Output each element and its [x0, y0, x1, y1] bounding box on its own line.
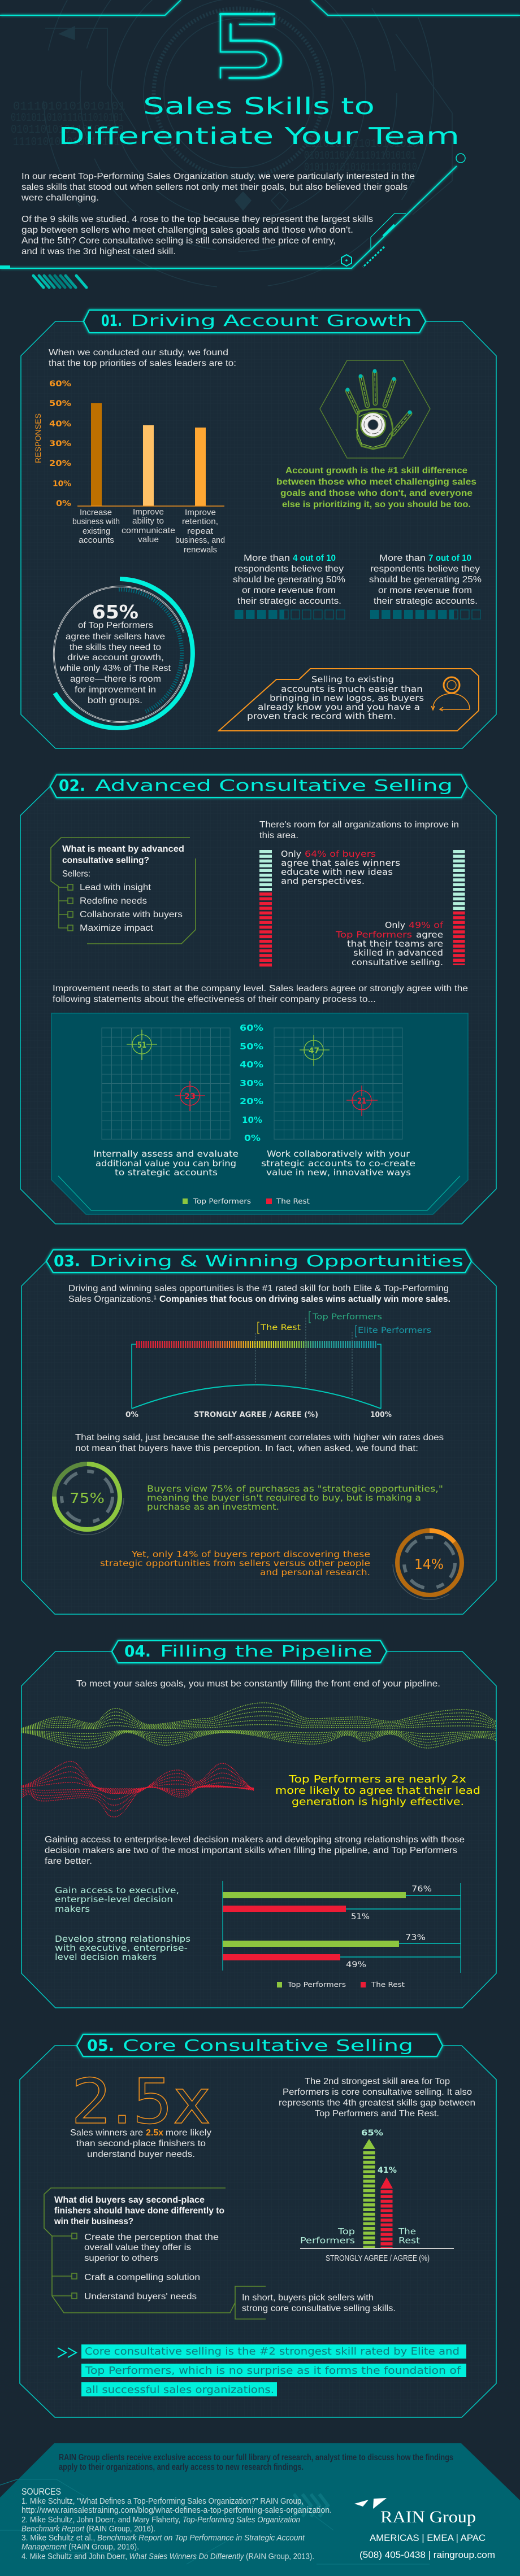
- radial stat: 65 percent: both groups.: [88, 696, 142, 705]
- bar chart: sales leader priorities: 20%: [49, 459, 71, 468]
- text: number one rated skill: Driving and winning sales opportunities is the #1 rated skill for both Elite & Top-Performing: [68, 1284, 449, 1293]
- stat: 4 out of 10: [233, 553, 345, 619]
- sources: Benchmark Report (RAIN Group, 2016).: [21, 2525, 155, 2534]
- stat: 4 out of 10: More than: [244, 553, 290, 563]
- text: second strongest skill: Top Performers and The Rest.: [315, 2109, 439, 2119]
- bar chart: sales leader priorities: retention,: [182, 517, 218, 526]
- big numeral 5: [220, 14, 281, 78]
- intro text: [21, 172, 415, 256]
- stat: 4 out of 10: 4 out of 10: [293, 553, 336, 563]
- title: Sales Skills to: [143, 93, 375, 120]
- heading 03: Driving & Winning Opportunities: [89, 1252, 463, 1270]
- text: 14 percent of buyers: strategic opportunities from sellers versus other people: [100, 1558, 370, 1568]
- sources: SOURCES: [21, 2486, 61, 2497]
- header frame line: [0, 0, 520, 15]
- bar chart: sales leader priorities: renewals: [184, 546, 217, 555]
- footer circuit pattern: [0, 2479, 430, 2564]
- intro text: Of the 9 skills we studied, 4 rose to the top because they represent the largest skills: [21, 215, 373, 224]
- box: what did buyers say: finishers should have done differently to: [54, 2206, 224, 2216]
- callout: account growth number one: goals and those who don't, and everyone: [280, 489, 473, 498]
- bar chart: executive access: 51%: [351, 1912, 370, 1921]
- bar chart: executive access: [55, 1881, 461, 1973]
- callout: account growth number one: between those who meet challenging sales: [276, 477, 476, 487]
- header lower frame with circle node, chevrons and hexagon: [0, 154, 465, 268]
- text: sales winners: than second-place finishers to: [76, 2139, 206, 2148]
- intro text: were challenging.: [21, 193, 99, 203]
- panel frame: [21, 321, 496, 748]
- background: HUD rings and binary pattern: 1110101011011010100101: [305, 173, 415, 186]
- box: what did buyers say: [44, 2188, 235, 2313]
- axis labels: 20%: [240, 1096, 263, 1106]
- stat: 4 out of 10: respondents believe they: [235, 564, 344, 574]
- callout: nearly 2x: more likely to agree that their lead: [275, 1785, 480, 1797]
- bar chart: sales leader priorities: ability to: [132, 517, 164, 526]
- text: room to improve: There's room for all organizations to improve in: [259, 820, 459, 830]
- label: elite performers: [356, 1326, 431, 1337]
- axis labels: 100%: [370, 1411, 392, 1419]
- bar chart: executive access: 76%: [411, 1885, 432, 1894]
- legend: Top Performers: [287, 1980, 346, 1989]
- box: what is advanced consultative selling: Maximize impact: [80, 923, 154, 933]
- text: sales winners: more likely: [166, 2128, 211, 2138]
- heading 02: [50, 775, 467, 797]
- text: fill the pipeline: To meet your sales goals, you must be constantly filling the front end of your pipeline.: [76, 1679, 440, 1689]
- callout: selling to existing accounts: bringing in new logos, as buyers: [270, 693, 424, 703]
- title: [58, 93, 460, 150]
- bar chart: sales leader priorities: 30%: [49, 439, 71, 448]
- label: top performers: [309, 1311, 382, 1323]
- meter: 64 percent of buyers: [266, 849, 400, 967]
- highlighted conclusion: all successful sales organizations.: [85, 2384, 274, 2396]
- bar chart: sales leader priorities: value: [138, 535, 159, 544]
- radial stat: 65 percent: agree—there is room: [70, 674, 161, 684]
- text: room to improve: [259, 820, 459, 840]
- box: what did buyers say: Craft a compelling solution: [84, 2273, 200, 2282]
- text: access to decision makers: fare better.: [45, 1856, 92, 1866]
- bar chart: 65 vs 41 percent: Performers: [300, 2235, 355, 2246]
- logo: RAIN Group: [354, 2498, 495, 2560]
- panel: 04 filling the pipeline: [21, 1641, 496, 2008]
- text: second strongest skill: Performers is core consultative selling. It also: [283, 2087, 472, 2097]
- callout: selling to existing accounts: already know you and you have a: [258, 702, 420, 712]
- bar chart: executive access: 73%: [405, 1933, 426, 1942]
- bar chart: sales leader priorities: communicate: [122, 526, 175, 535]
- captions: to strategic accounts: [115, 1167, 218, 1178]
- sources: 4. Mike Schultz and John Doerr, What Sales Winners Do Differently (RAIN Group, 2013).: [21, 2552, 314, 2561]
- text: buyer perception: [75, 1433, 444, 1453]
- chart panel: target grids: [51, 1013, 468, 1214]
- captions: additional value you can bring: [96, 1158, 236, 1169]
- callout: selling to existing accounts: accounts is much easier than: [281, 684, 423, 694]
- heading 04: 04.: [124, 1642, 151, 1660]
- sources: 2. Mike Schultz, John Doerr, and Mary Flaherty, Top-Performing Sales Organization: [21, 2516, 300, 2525]
- heading 05: [77, 2034, 443, 2056]
- text: buyer perception: That being said, just because the self-assessment correlates with higher win rates does: [75, 1433, 444, 1442]
- icon: person with cycle arrow: [431, 677, 470, 711]
- heading 04: [112, 1641, 387, 1663]
- bar chart: sales leader priorities: [33, 380, 225, 555]
- bar chart: executive access: Develop strong relationships: [55, 1934, 190, 1944]
- label: the rest: The Rest: [260, 1323, 301, 1332]
- radial stat: 65 percent: agree their sellers have: [66, 632, 165, 642]
- bar chart: sales leader priorities: Increase: [80, 508, 112, 517]
- bar chart: 65 vs 41 percent: 65%: [361, 2129, 383, 2138]
- bar chart: 65 vs 41 percent: The: [398, 2226, 416, 2237]
- callout: nearly 2x: [275, 1773, 480, 1808]
- intro text: sales skills that stood out when sellers not only met their goals, but also believed their goals: [21, 182, 408, 192]
- bar chart: 65 vs 41 percent: 41%: [378, 2166, 397, 2175]
- grid: right: [274, 1028, 402, 1139]
- logo: RAIN Group: AMERICAS | EMEA | APAC: [370, 2533, 486, 2543]
- box: what did buyers say: What did buyers say second-place: [54, 2195, 205, 2205]
- grid: left: [102, 1028, 230, 1139]
- text: number one rated skill: Sales Organizations.¹: [68, 1294, 157, 1304]
- bar chart: sales leader priorities: RESPONSES: [33, 413, 42, 463]
- panel frame: [21, 1261, 496, 1614]
- text: sales winners: [70, 2128, 211, 2159]
- bar chart: 65 vs 41 percent: Top: [337, 2226, 355, 2237]
- sources: 1. Mike Schultz, "What Defines a Top-Performing Sales Organization?" RAIN Group,: [21, 2497, 304, 2506]
- axis labels: 0%: [125, 1411, 138, 1419]
- target: 23: 23: [184, 1092, 196, 1101]
- text: 75 percent of purchases: meaning the buyer isn't required to buy, but is making a: [147, 1493, 421, 1503]
- text: 14 percent of buyers: and personal research.: [260, 1567, 370, 1577]
- stat: 4 out of 10: their strategic accounts.: [237, 596, 341, 606]
- bar chart: executive access: enterprise-level decision: [55, 1894, 173, 1904]
- box: what did buyers say: win their business?: [54, 2217, 133, 2226]
- label: elite performers: Elite Performers: [358, 1326, 431, 1335]
- callout: in short: In short, buyers pick sellers with: [242, 2293, 374, 2303]
- intro text: gap between sellers who meet challenging sales goals and those who don't.: [21, 225, 353, 235]
- stat: 7 out of 10: respondents believe they: [370, 564, 480, 574]
- callout: account growth number one: else is prioritizing it, so you should be too.: [282, 500, 471, 509]
- text: 75 percent of purchases: [147, 1484, 443, 1512]
- callout: selling to existing accounts: [219, 669, 479, 731]
- text: 14 percent of buyers: [100, 1549, 370, 1577]
- legend: [277, 1980, 405, 1989]
- target: 21: [346, 1086, 378, 1116]
- highlighted conclusion: Core consultative selling is the #2 strongest skill rated by Elite and: [85, 2346, 460, 2357]
- logo: RAIN Group: RAIN Group: [380, 2508, 476, 2526]
- radial stat: 65 percent: [54, 579, 193, 728]
- axis labels: 60%: [240, 1023, 263, 1033]
- axis labels: 50%: [240, 1041, 263, 1052]
- text: sales winners: Sales winners are: [70, 2128, 143, 2138]
- bar chart: sales leader priorities: 40%: [49, 420, 71, 429]
- meter: 64 percent of buyers: 64% of buyers: [305, 849, 376, 859]
- legend: The Rest: [276, 1197, 310, 1205]
- meter: 64 percent of buyers: and perspectives.: [281, 876, 365, 886]
- meter: 49 percent of top performers: Only: [385, 920, 405, 930]
- heading 03: [46, 1250, 471, 1272]
- stat: 7 out of 10: or more revenue from: [378, 586, 472, 595]
- sources: 3. Mike Schultz et al., Benchmark Report on Top Performance in Strategic Account: [21, 2534, 305, 2543]
- meter: 64 percent of buyers: Only: [281, 849, 301, 859]
- text: second strongest skill: [279, 2077, 475, 2119]
- text: sales winners: 2.5x: [146, 2128, 163, 2138]
- bar chart: executive access: Gain access to executive,: [55, 1885, 179, 1895]
- sources: [21, 2486, 332, 2561]
- axis labels: 30%: [240, 1078, 263, 1088]
- title: Differentiate Your Team: [58, 123, 460, 150]
- text: clients receive: [59, 2453, 453, 2472]
- heading 05: Core Consultative Selling: [123, 2036, 413, 2055]
- intro text: and it was the 3rd highest rated skill.: [21, 247, 176, 256]
- text: 14 percent of buyers: Yet, only 14% of buyers report discovering these: [131, 1549, 370, 1559]
- text: priorities intro: When we conducted our study, we found: [49, 348, 228, 358]
- box: what is advanced consultative selling: Redefine needs: [80, 896, 147, 906]
- box: what did buyers say: Understand buyers' needs: [84, 2292, 197, 2302]
- panel frame: [21, 1651, 496, 2008]
- stat: 7 out of 10: More than: [379, 553, 426, 563]
- text: buyer perception: not mean that buyers have this perception. In fact, when asked, we found that:: [75, 1444, 418, 1453]
- target: 51: [127, 1030, 157, 1060]
- logo: RAIN Group: (508) 405-0438 | raingroup.com: [359, 2549, 495, 2560]
- bar chart: 65 vs 41 percent: STRONGLY AGREE / AGREE (%): [326, 2254, 430, 2263]
- meter: 49 percent of top performers: agree: [416, 930, 443, 940]
- text: improvement intro: [53, 984, 468, 1004]
- stat: 2.5x outlined: 2.5x: [71, 2065, 211, 2138]
- captions: Work collaboratively with your: [267, 1149, 410, 1159]
- bar chart: sales leader priorities: 10%: [53, 480, 71, 489]
- box: what is advanced consultative selling: Sellers:: [62, 869, 90, 879]
- radial stat: 65 percent: for improvement in: [75, 685, 156, 695]
- bar chart: sales leader priorities: 60%: [49, 380, 71, 389]
- stat: 4 out of 10: or more revenue from: [242, 586, 336, 595]
- donut: 75 percent: [54, 1464, 124, 1535]
- background: HUD rings and binary pattern: 0101101010101111101010: [304, 162, 417, 175]
- label: top performers: Top Performers: [312, 1313, 382, 1322]
- radial stat: 65 percent: while only 43% of The Rest: [59, 664, 171, 673]
- bar chart: 65 vs 41 percent: Rest: [398, 2235, 420, 2246]
- axis labels: STRONGLY AGREE / AGREE (%): [194, 1411, 318, 1419]
- stat: 4 out of 10: should be generating 50%: [233, 575, 345, 585]
- callout: account growth number one: Account growth is the #1 skill difference: [285, 466, 467, 476]
- chart: agreement distribution: [125, 1311, 431, 1419]
- axis labels: 10%: [242, 1115, 262, 1125]
- stat: 7 out of 10: [369, 553, 482, 619]
- background: HUD rings and binary pattern: 0111010101010101: [13, 101, 125, 114]
- panel frame: [20, 786, 496, 1224]
- background: HUD rings and binary pattern: 0101101010110101010: [11, 124, 124, 137]
- bar chart: sales leader priorities: 0%: [56, 499, 71, 508]
- bar chart: sales leader priorities: accounts: [79, 536, 114, 545]
- highlighted conclusion: [81, 2344, 466, 2396]
- background: HUD rings and binary pattern: 0101011010111011010101: [11, 112, 124, 125]
- bar chart: sales leader priorities: Improve: [133, 508, 164, 517]
- text: 75 percent of purchases: purchase as an investment.: [147, 1502, 279, 1512]
- box: what is advanced consultative selling: Lead with insight: [80, 883, 151, 892]
- text: priorities intro: that the top priorities of sales leaders are to:: [49, 359, 236, 368]
- legend: [183, 1197, 310, 1205]
- bar chart: executive access: 49%: [346, 1960, 366, 1969]
- meter: 64 percent of buyers: educate with new ideas: [281, 867, 393, 877]
- intro text: And the 5th? Core consultative selling is still considered the price of entry,: [21, 236, 336, 246]
- donut: 75 percent: 75%: [70, 1490, 105, 1506]
- background: HUD rings and binary pattern: 0101011010111011010101: [304, 150, 416, 163]
- axis labels: 40%: [240, 1060, 263, 1070]
- radial stat: 65 percent: of Top Performers: [78, 621, 153, 630]
- text: second strongest skill: The 2nd strongest skill area for Top: [305, 2077, 450, 2086]
- text: room to improve: this area.: [259, 831, 298, 840]
- wave: the rest: [21, 1762, 254, 1817]
- background: HUD rings and binary pattern: 1110101010100101010: [13, 136, 126, 149]
- captions: strategic accounts to co-create: [261, 1158, 415, 1169]
- meter: 49 percent of top performers: consultative selling.: [352, 957, 443, 967]
- hatch stripes: [33, 276, 86, 287]
- box: what is advanced consultative selling: [51, 838, 196, 944]
- meter: 49 percent of top performers: 49% of: [409, 920, 444, 930]
- callout: selling to existing accounts: Selling to existing: [311, 674, 394, 685]
- heading 01: 01.: [101, 311, 122, 330]
- text: priorities intro: [49, 348, 236, 368]
- bar chart: executive access: level decision makers: [55, 1952, 157, 1962]
- label: the rest: [258, 1322, 301, 1333]
- axis labels: [240, 1023, 263, 1143]
- sources: http://www.rainsalestraining.com/blog/what-defines-a-top-performing-sales-organization.: [21, 2506, 332, 2515]
- axis labels: [125, 1411, 392, 1419]
- donut: 14 percent: 14%: [414, 1556, 444, 1572]
- panel: 05 core consultative selling: [20, 2034, 496, 2417]
- captions: Internally assess and evaluate: [93, 1149, 239, 1159]
- icon: circuit hand in hexagon: [320, 360, 430, 458]
- text: number one rated skill: Companies that focus on driving sales wins actually win more sales.: [159, 1294, 450, 1304]
- target: 47: 47: [309, 1047, 319, 1056]
- box: what did buyers say: overall value they offer is: [84, 2243, 191, 2252]
- background: HUD rings and binary pattern: 1110101011010101010: [305, 138, 418, 151]
- meter: 49 percent of top performers: Top Performers: [335, 930, 412, 940]
- meter: 64 percent of buyers: agree that sales winners: [281, 858, 400, 868]
- captions: [93, 1149, 415, 1178]
- text: access to decision makers: Gaining access to enterprise-level decision makers and developing strong relationships with those: [45, 1835, 465, 1845]
- target: 47: [300, 1035, 330, 1066]
- bar chart: sales leader priorities: business, and: [175, 536, 225, 545]
- bar chart: 65 vs 41 percent: [300, 2129, 454, 2263]
- bar chart: executive access: with executive, enterprise-: [55, 1943, 188, 1953]
- bar chart: executive access: makers: [55, 1904, 90, 1914]
- text: sales winners: understand buyer needs.: [87, 2150, 195, 2159]
- radial stat: 65 percent: the skills they need to: [70, 643, 161, 652]
- legend: Top Performers: [193, 1197, 251, 1205]
- meter: 49 percent of top performers: [335, 850, 459, 967]
- bar chart: sales leader priorities: 50%: [49, 399, 71, 408]
- stat: 7 out of 10: their strategic accounts.: [374, 596, 478, 606]
- target: 21: 21: [357, 1097, 366, 1106]
- legend: The Rest: [371, 1980, 405, 1989]
- bar chart: sales leader priorities: Improve: [185, 508, 216, 517]
- callout: in short: [235, 2286, 396, 2319]
- text: access to decision makers: decision makers are two of the most important skills when filling the pipeline, and Top Performers: [45, 1846, 457, 1855]
- sources: Management (RAIN Group, 2016).: [21, 2543, 139, 2552]
- text: number one rated skill: [68, 1284, 450, 1304]
- stat: 7 out of 10: should be generating 25%: [369, 575, 482, 585]
- stat: 7 out of 10: 7 out of 10: [428, 553, 471, 563]
- wave: top performers: [21, 1703, 496, 1748]
- heading 01: Driving Account Growth: [131, 311, 412, 330]
- captions: value in new, innovative ways: [266, 1167, 411, 1178]
- panel: 02 advanced consultative selling: [20, 775, 496, 1224]
- panel frame: [20, 2046, 496, 2417]
- panel: 03 driving and winning opportunities: [21, 1250, 496, 1614]
- axis labels: 0%: [244, 1133, 261, 1143]
- meter: 49 percent of top performers: that their teams are: [347, 939, 443, 949]
- callout: selling to existing accounts: proven track record with them.: [247, 711, 396, 721]
- text: improvement intro: following statements about the effectiveness of their company process to...: [53, 995, 376, 1004]
- radial stat: 65 percent: drive account growth,: [67, 653, 164, 662]
- callout: in short: strong core consultative selling skills.: [242, 2304, 396, 2313]
- box: what is advanced consultative selling: Collaborate with buyers: [80, 910, 183, 919]
- target: 23: [175, 1081, 205, 1111]
- bar chart: sales leader priorities: existing: [83, 527, 110, 536]
- box: what is advanced consultative selling: What is meant by advanced: [62, 844, 184, 854]
- donut: 14 percent: [393, 1531, 462, 1599]
- text: 75 percent of purchases: Buyers view 75% of purchases as "strategic opportunities,": [147, 1484, 443, 1494]
- callout: nearly 2x: generation is highly effective.: [292, 1796, 464, 1808]
- footer panel: [0, 2443, 520, 2576]
- highlighted conclusion: Top Performers, which is no surprise as it forms the foundation of: [85, 2365, 461, 2377]
- heading 01: [84, 310, 426, 333]
- box: what is advanced consultative selling: consultative selling?: [62, 856, 149, 865]
- panel: 01 driving account growth: [21, 310, 496, 748]
- radial stat: 65 percent: 65%: [92, 601, 138, 623]
- intro text: In our recent Top-Performing Sales Organization study, we were particularly interested in the: [21, 172, 415, 181]
- text: second strongest skill: represents the 4th greatest skills gap between: [279, 2098, 475, 2108]
- callout: account growth number one: [276, 466, 476, 509]
- text: access to decision makers: [45, 1835, 465, 1866]
- box: what did buyers say: superior to others: [84, 2254, 158, 2263]
- heading 05: 05.: [87, 2036, 114, 2055]
- heading 02: 02.: [59, 776, 85, 795]
- text: clients receive: apply to their organizations, and early access to new research findings.: [59, 2462, 304, 2472]
- bar chart: sales leader priorities: business with: [72, 517, 120, 526]
- icon: double chevron: [58, 2348, 76, 2357]
- heading 02: Advanced Consultative Selling: [95, 776, 453, 795]
- bar chart: sales leader priorities: repeat: [187, 527, 213, 536]
- callout: nearly 2x: Top Performers are nearly 2x: [288, 1773, 466, 1785]
- target: 51: 51: [137, 1041, 146, 1050]
- heading 03: 03.: [54, 1252, 80, 1270]
- text: improvement intro: Improvement needs to start at the company level. Sales leaders agree or strongly agree with the: [53, 984, 468, 993]
- box: what did buyers say: Create the perception that the: [84, 2233, 219, 2242]
- heading 04: Filling the Pipeline: [160, 1642, 372, 1660]
- background: HUD rings and binary pattern: [11, 0, 452, 288]
- meter: 49 percent of top performers: skilled in advanced: [353, 948, 443, 958]
